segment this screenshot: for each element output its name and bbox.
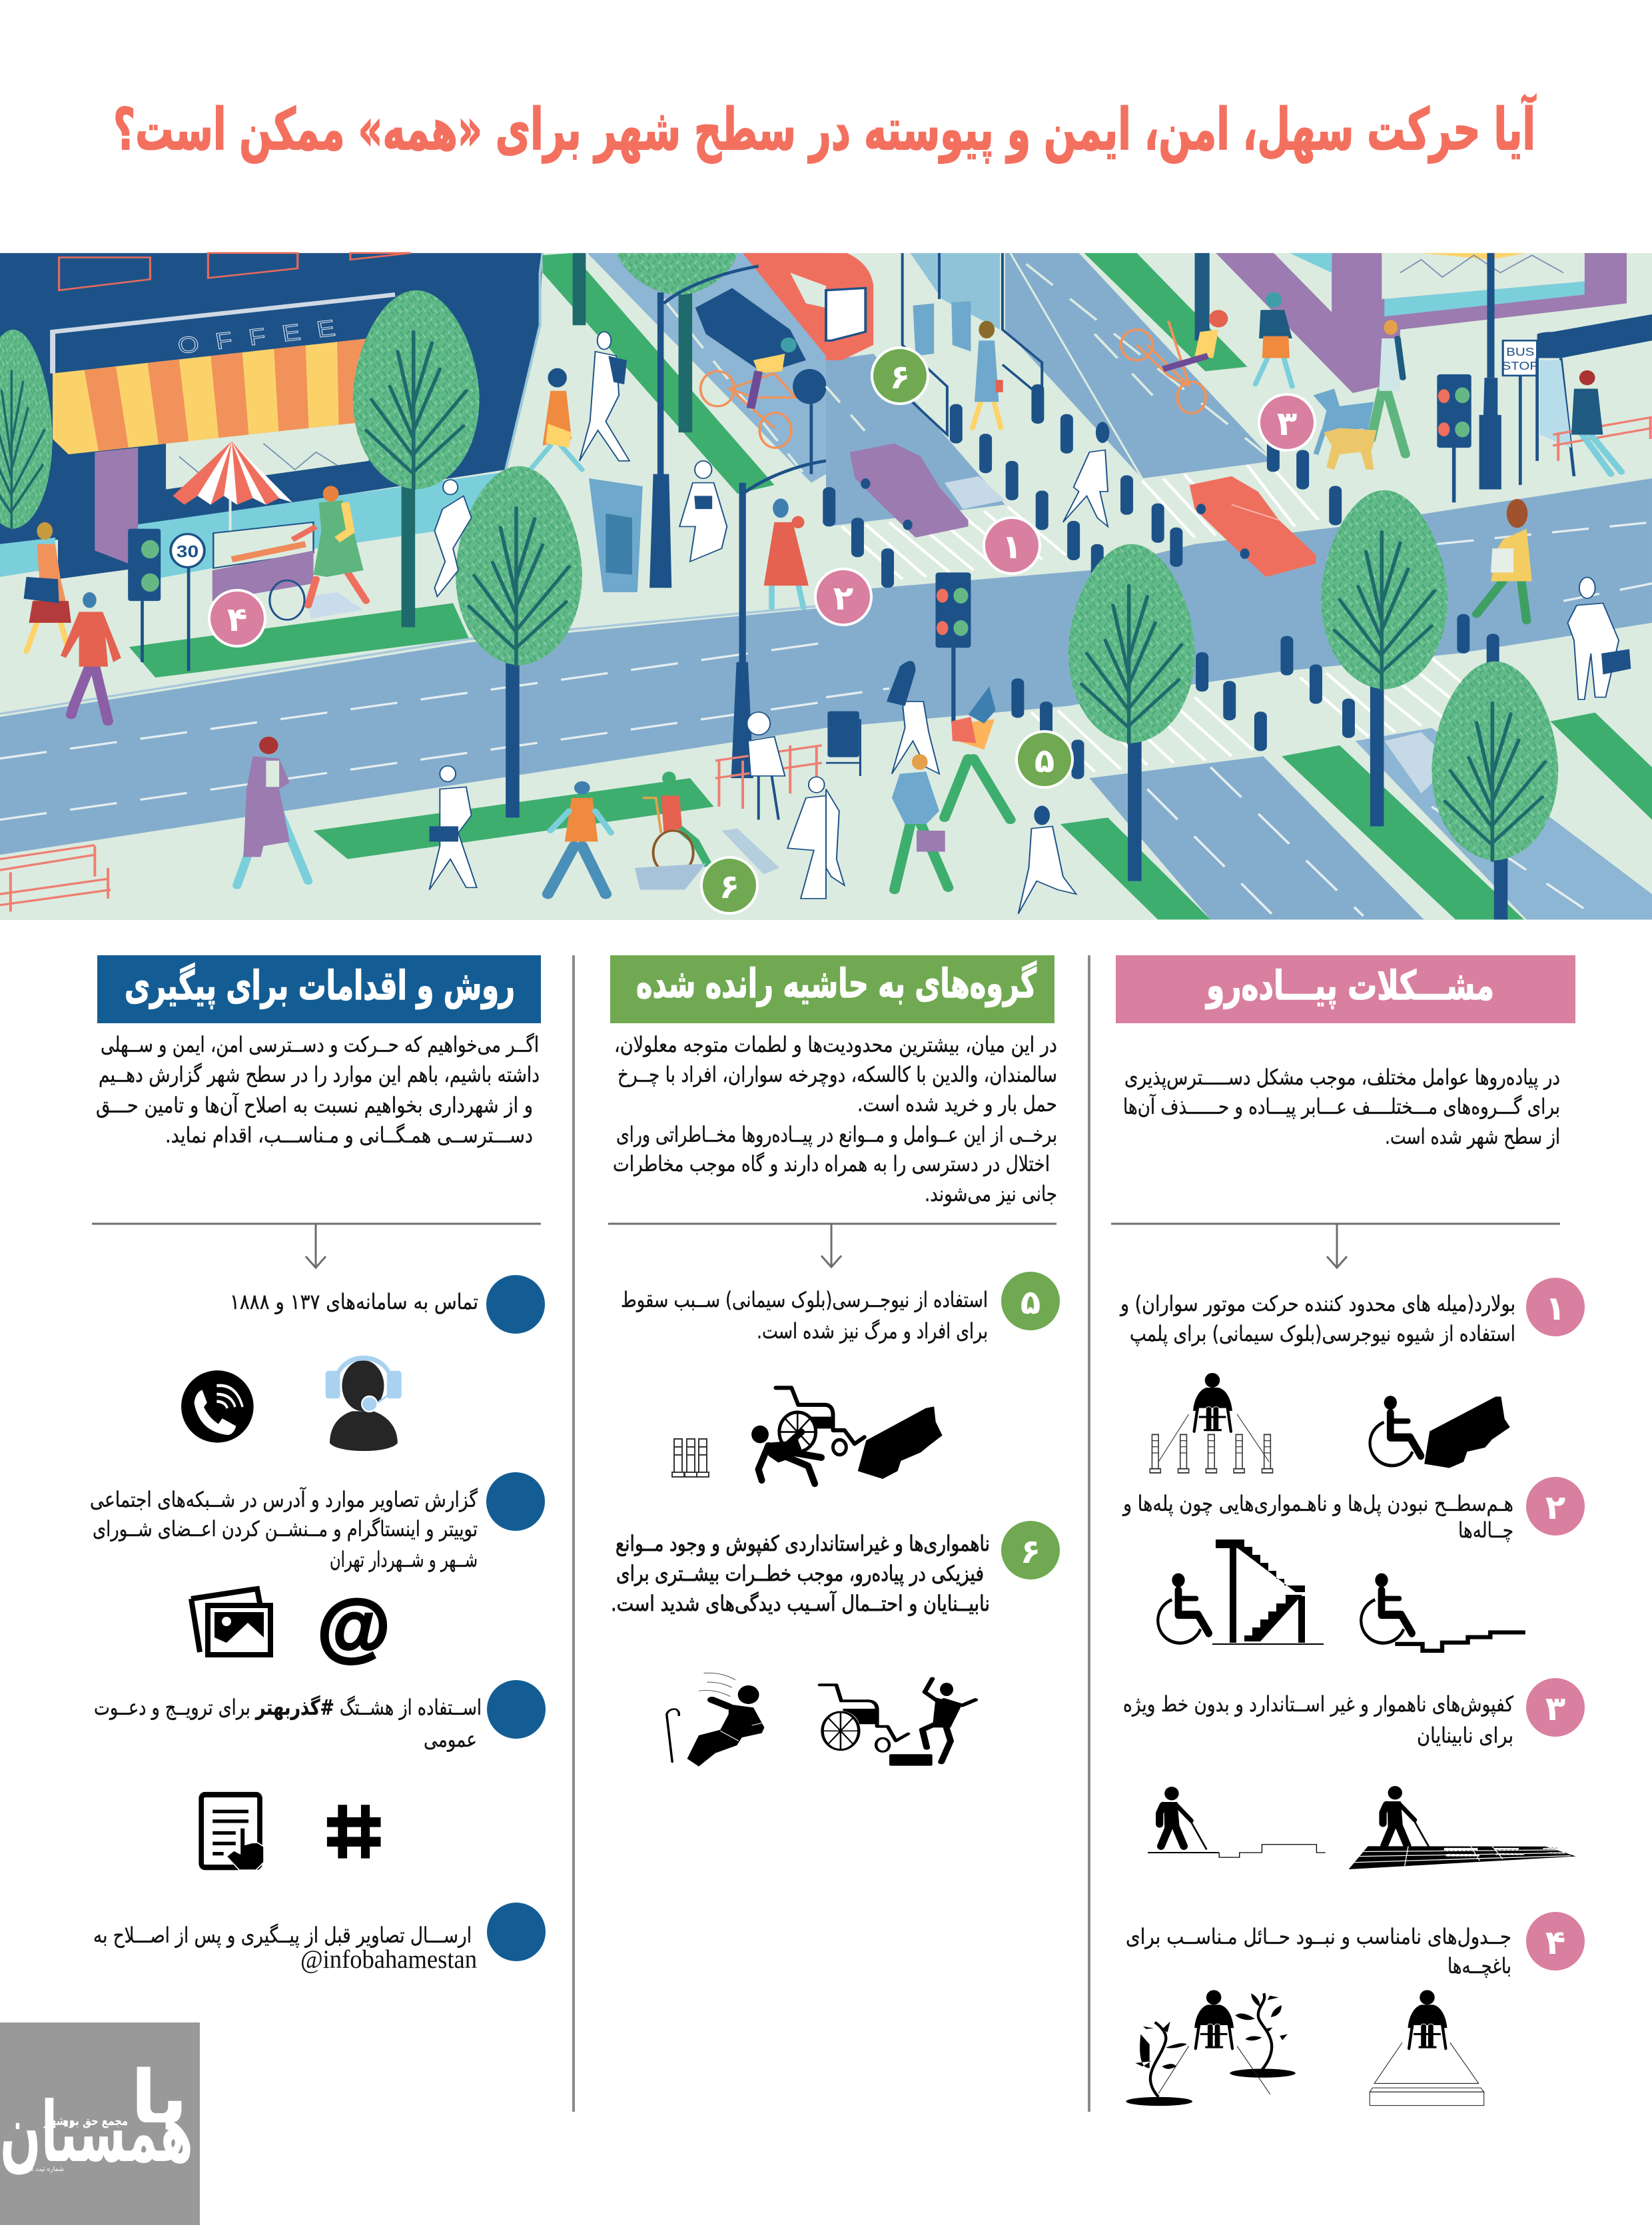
item 5: ۵ xyxy=(1021,1283,1040,1322)
wheelchair user xyxy=(635,771,779,890)
heading: methods and follow-up: روش و اقدامات برای پیگیری xyxy=(125,963,515,1009)
map badge 5 xyxy=(1017,731,1072,787)
logo: Bahamestan: شماره ثبت ۳۶۸۱۵ xyxy=(17,2166,64,2173)
intro text: برای گـــروه‌های مـــختلــــف عـــابر پیـــاده و حــــــذف آن‌ها xyxy=(1123,1093,1560,1119)
item 6: ۶ xyxy=(1021,1532,1040,1571)
intro text: از سطح شهر شده است. xyxy=(1385,1124,1560,1149)
item: report on social media xyxy=(90,1472,545,1572)
intro text: در این میان، بیشترین محدودیت‌ها و لطمات متوجه معلولان، xyxy=(614,1032,1057,1057)
intro text: داشته باشیم، باهم این موارد را در سطح شهر گزارش دهــیم xyxy=(99,1062,540,1087)
woman outline bottom xyxy=(1019,806,1076,914)
icon: hash xyxy=(327,1805,381,1859)
tree: road side xyxy=(456,466,582,817)
outline at left edge xyxy=(826,789,845,885)
icon: small bollards xyxy=(672,1439,709,1477)
icon: wheelchair and concrete barrier xyxy=(1370,1396,1510,1468)
yellow dog xyxy=(1324,428,1376,470)
tree: left edge xyxy=(0,330,53,529)
item 1 xyxy=(1119,1278,1585,1346)
street lamps xyxy=(649,266,826,778)
street illustration xyxy=(0,253,1652,920)
traffic light and speed sign: 30 xyxy=(177,542,199,561)
bollards xyxy=(823,384,1499,779)
map badge 3: ۳ xyxy=(1277,404,1297,443)
item 2 xyxy=(1122,1477,1585,1543)
tree: middle right xyxy=(1321,490,1447,826)
heading: pedestrian problems xyxy=(1116,955,1575,1023)
intro text: در پیاده‌روها عوامل مختلف، موجب مشکل دســـــترس‌پذیری xyxy=(1124,1065,1560,1090)
litter bin xyxy=(826,711,860,776)
item: report on social media: گزارش تصاویر موارد و آدرس در شــبکه‌های اجتماعی xyxy=(90,1486,478,1512)
map badge 6 bottom: ۶ xyxy=(719,867,739,906)
tree: crossing xyxy=(1068,544,1195,881)
icon: person falling from wheelchair and barrier xyxy=(751,1388,943,1484)
man walking two dogs xyxy=(1371,320,1406,454)
outline walker on crossing xyxy=(1063,422,1109,526)
man in red jacket xyxy=(61,592,121,721)
woman in yellow coat xyxy=(1477,499,1532,621)
intro text: دســـترســی همـگــانی و مـناســـب، اقدام نماید. xyxy=(165,1122,533,1148)
item 4: جــدول‌های نامناسب و نبــود حــائل مـناســب برای xyxy=(1126,1924,1511,1949)
intro text: و از شهرداری بخواهیم نسبت به اصلاح آن‌ها و تامین حـــق xyxy=(96,1092,533,1118)
item 4: ۴ xyxy=(1545,1923,1565,1962)
lamp by bus stop xyxy=(1479,253,1501,490)
coral car xyxy=(1190,476,1316,577)
item 5: استفاده از نیوجــرسی(بلوک سیمانی) ســبب سقوط xyxy=(621,1287,988,1312)
map badge 4: ۴ xyxy=(227,600,247,639)
bicycle sign xyxy=(793,369,827,474)
heading: marginalised groups: گروه‌های به حاشیه رانده شده xyxy=(636,961,1036,1007)
item 5 xyxy=(621,1272,1060,1344)
intro text: جانی نیز می‌شوند. xyxy=(925,1181,1057,1206)
item 6: فیزیکی در پیاده‌رو، موجب خطــرات بیشــتری برای xyxy=(616,1561,984,1586)
woman with long hair outline xyxy=(887,661,939,774)
item 3: برای نابینایان xyxy=(1417,1723,1513,1748)
lower diagonal roads xyxy=(1060,713,1652,919)
intro text: سالمندان، والدین با کالسکه، دوچرخه سواران، افراد با چــرخ xyxy=(618,1062,1057,1087)
heading: marginalised groups xyxy=(610,955,1054,1023)
map badge 6 top: ۶ xyxy=(890,358,910,396)
column separators xyxy=(572,955,1090,2112)
icon: wheelchair and staircase xyxy=(1158,1540,1324,1644)
map badge 3 xyxy=(1259,394,1315,450)
item 4: باغچــه‌ها xyxy=(1447,1953,1511,1979)
woman in blue dress xyxy=(973,321,1003,428)
map badge 6 bottom xyxy=(701,857,757,913)
woman on phone in purple coat xyxy=(237,737,308,885)
crosswalks xyxy=(842,463,1495,771)
seated man xyxy=(1571,370,1621,474)
item 6: نابیــنایان و احتــمال آسـیب دیدگی‌های شدید است. xyxy=(611,1590,990,1616)
icon: photos xyxy=(191,1589,270,1655)
intro text xyxy=(1123,1065,1560,1149)
intro text: اختلال در دسترسی را به همراه دارند و گاه موجب مخاطرات xyxy=(613,1151,1050,1176)
item: report on social media: توییتر و اینستاگرام و مــنشــن کردن اعــضای شــورای xyxy=(93,1516,478,1542)
blue dog xyxy=(1313,388,1374,454)
purple building xyxy=(1216,253,1627,393)
logo: Bahamestan: مجمع حق بر شهر xyxy=(43,2114,128,2128)
icon: wheelchair and person tripping on block xyxy=(820,1679,975,1766)
intro text: حمل بار و خرید شده است. xyxy=(857,1091,1057,1116)
bus front xyxy=(826,253,873,360)
benches xyxy=(0,745,822,911)
bus stop shelter: BUS xyxy=(1506,346,1534,359)
map badge 6 top xyxy=(872,348,928,404)
person in orange shirt xyxy=(548,781,611,894)
item 3 xyxy=(1123,1678,1585,1748)
intro text: اگــر می‌خواهیم که حــرکت و دســترسی امن، ایمن و ســهلی xyxy=(101,1032,539,1057)
item: call hotlines xyxy=(230,1275,545,1334)
item 1: ۱ xyxy=(1545,1289,1565,1328)
icon: wheelchair among planters xyxy=(1126,1990,1296,2106)
cyclist with orange bicycle xyxy=(701,338,797,448)
tree: far right xyxy=(1432,662,1558,919)
logo: Bahamestan xyxy=(0,2022,200,2225)
item 5: برای افراد و مرگ نیز شده است. xyxy=(757,1318,988,1344)
icon: blind person on tactile paving xyxy=(1349,1786,1576,1869)
heading: pedestrian problems: مشـــکلات پیـــاده‌رو xyxy=(1205,963,1494,1009)
bus stop shelter xyxy=(1501,314,1652,485)
divider with arrow xyxy=(92,1224,541,1268)
woman with yellow bag xyxy=(532,368,582,470)
logo: Bahamestan: همستان xyxy=(0,2084,193,2181)
purple car xyxy=(850,444,969,538)
upper roads xyxy=(826,253,1274,526)
shop building: OFFEE xyxy=(176,314,354,359)
pedestrian with navy bag xyxy=(430,766,477,890)
grass strips xyxy=(129,603,714,859)
item: hashtag xyxy=(94,1680,546,1752)
item: report on social media: شــهر و شــهردار تهران xyxy=(330,1547,478,1572)
item: hashtag: عمومی xyxy=(424,1727,477,1752)
icon: phone xyxy=(181,1370,254,1443)
mother with child xyxy=(764,498,809,608)
illustration right half xyxy=(823,253,1652,919)
map badge 1: ۱ xyxy=(1002,528,1022,566)
panel: pedestrian problems xyxy=(1111,955,1585,2106)
road markings xyxy=(945,476,1453,793)
walker outline with backpack xyxy=(580,332,629,461)
intro text: برخــی از این عــوامل و مــوانع در پیــاده‌روها مخــاطراتی ورای xyxy=(616,1122,1057,1147)
main road xyxy=(0,606,826,855)
item 6 xyxy=(611,1521,1060,1616)
item: send before and after photos: ارســـال تصاویر قبل از پیــگیری و پس از اصـــلاح به xyxy=(93,1923,472,1948)
main cross road xyxy=(826,478,1652,728)
panel: marginalised groups xyxy=(608,955,1060,1767)
intro text xyxy=(613,1032,1057,1206)
item 3: ۳ xyxy=(1545,1689,1565,1728)
item: hashtag: اســتفاده از هشــتگ #گذربهتر برای ترویــج و دعــوت xyxy=(94,1695,482,1720)
vendor cart and umbrella xyxy=(173,441,364,620)
woman outline at bench xyxy=(747,712,785,820)
icon: document with pointer xyxy=(201,1795,264,1870)
traffic light and speed sign xyxy=(128,529,205,671)
intro text xyxy=(96,1032,540,1148)
traffic light middle xyxy=(935,572,971,723)
item 6: ناهمواری‌ها و غیراستانداردی کفپوش و وجود مــوانع xyxy=(616,1531,990,1556)
outline at right edge xyxy=(787,777,826,899)
man with briefcase outline xyxy=(1567,578,1631,699)
map badge 2 xyxy=(815,569,871,625)
parking meter xyxy=(589,478,643,592)
item 1: استفاده از شیوه نیوجرسی(بلوک سیمانی) برای پلمپ xyxy=(1130,1321,1515,1346)
divider with arrow xyxy=(1111,1224,1560,1268)
item 4 xyxy=(1126,1912,1585,1979)
traffic light top right xyxy=(1437,374,1471,502)
item 3: کفپوش‌های ناهموار و غیر اســتاندارد و بدون خط ویژه xyxy=(1123,1691,1514,1717)
shop building xyxy=(0,253,543,584)
person with backpack xyxy=(945,686,1011,820)
divider with arrow xyxy=(608,1224,1056,1267)
map badge 1 xyxy=(984,518,1040,574)
vendor person xyxy=(292,486,366,606)
woman outline xyxy=(679,461,727,562)
woman with orange skirt xyxy=(1256,292,1292,386)
item: call hotlines: تماس به سامانه‌های ۱۳۷ و ۱۸۸۸ xyxy=(230,1289,478,1314)
map badge 2: ۲ xyxy=(833,579,853,618)
map badge 4 xyxy=(209,590,265,646)
icon: elderly person falling xyxy=(667,1673,764,1767)
heading: methods and follow-up xyxy=(97,955,541,1023)
icon: blind person with uneven pavement xyxy=(1148,1787,1326,1857)
icon: at sign: @ xyxy=(317,1585,390,1668)
map badge 5: ۵ xyxy=(1034,741,1054,780)
item: send before and after photos xyxy=(93,1903,546,1974)
item: send before and after photos: @infobahamestan xyxy=(300,1945,477,1974)
item 2: هـم‌سطــح نبودن پل‌ها و ناهـمواری‌هایی چون پله‌ها و xyxy=(1122,1491,1513,1516)
bus stop shelter: STOP xyxy=(1501,360,1539,373)
icon: wheelchair and broken steps xyxy=(1361,1573,1525,1651)
icon: wheelchair and kerb xyxy=(1370,1990,1484,2106)
cyclist on coral bicycle xyxy=(1121,310,1228,413)
icon: call-centre agent xyxy=(326,1358,402,1451)
item 2: چــاله‌ها xyxy=(1458,1518,1513,1543)
tree: in front of shop xyxy=(353,290,480,628)
upper diagonal green strip and road xyxy=(543,253,826,494)
poles, railing and bins xyxy=(903,253,1210,434)
van and bus xyxy=(695,253,826,374)
man with purple case xyxy=(892,754,948,890)
logo: Bahamestan: با xyxy=(131,2054,188,2140)
pedestrian beside tree xyxy=(434,480,472,597)
woman with blue bag xyxy=(24,522,71,652)
panel: methods and follow-up xyxy=(90,955,546,1974)
tree: top centre xyxy=(573,253,737,432)
item 2: ۲ xyxy=(1545,1488,1565,1527)
item 1: بولارد(میله های محدود کننده حرکت موتور سواران) و xyxy=(1119,1291,1515,1316)
icon: wheelchair between bollards xyxy=(1150,1373,1273,1473)
illustration left half xyxy=(0,253,827,911)
